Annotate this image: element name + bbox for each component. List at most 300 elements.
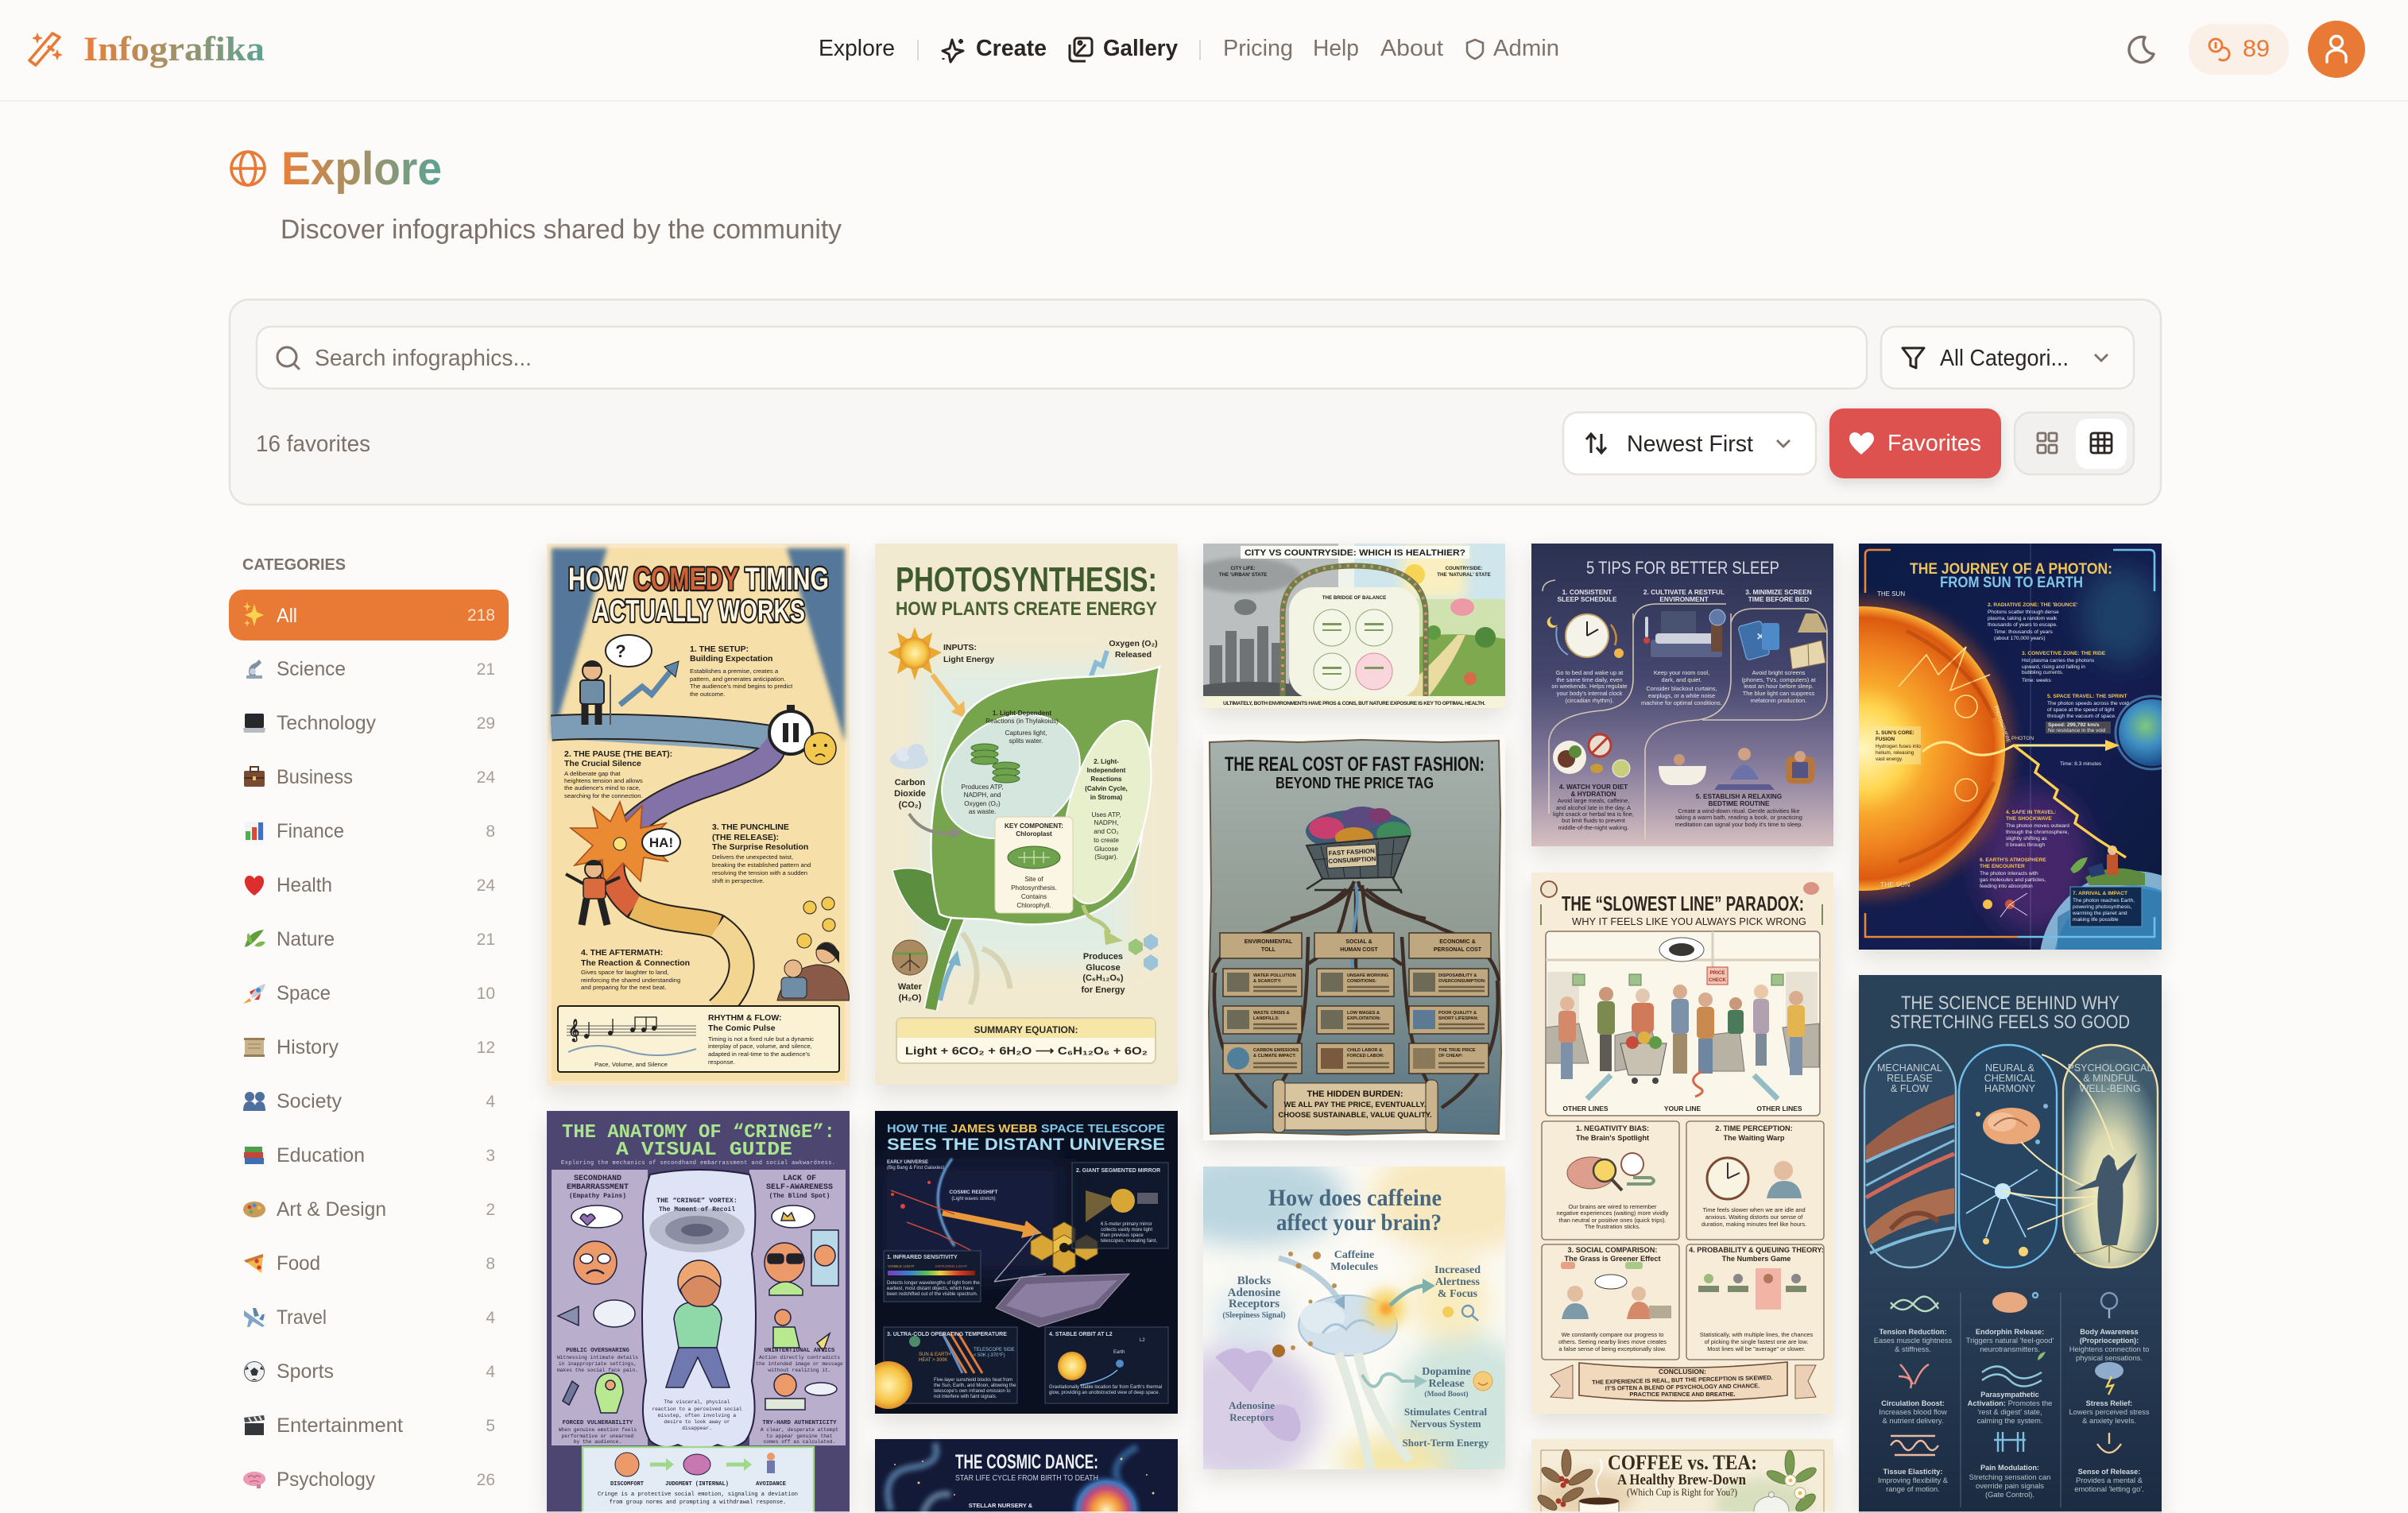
category Sports	[245, 1360, 495, 1383]
infographic card: The Slowest Line Paradox: others. Seeing nearby lines move creates	[1558, 1338, 1667, 1345]
benefit text: Lowers perceived stress	[2069, 1407, 2150, 1416]
photon annotations: Hydrogen fuses into	[1876, 744, 1921, 749]
caffeine labels: Caffeine	[1334, 1249, 1374, 1261]
photon annotations: of space at the speed of light	[2047, 707, 2114, 713]
photosynthesis labels: Independent	[1087, 767, 1126, 774]
infographic card: The Slowest Line Paradox: Time feels slower when we are idle and	[1702, 1206, 1806, 1213]
photosynthesis labels	[894, 639, 1158, 1003]
sleep bottom text: light snack or herbal tea is fine,	[1553, 811, 1634, 818]
shoppers	[1558, 985, 1805, 1079]
category select: All Categori...	[1940, 346, 2069, 371]
capsule panels: & MINDFUL	[2083, 1073, 2137, 1084]
photon annotations: thousands of years to escape.	[1988, 622, 2058, 628]
capsule panels: PSYCHOLOGICAL	[2068, 1062, 2153, 1074]
caffeine molecules and receptors	[1215, 1252, 1337, 1441]
countryside hills	[1354, 564, 1505, 708]
webb labels: (Light waves stretch)	[951, 1197, 996, 1202]
infographic card: The Real Cost of Fast Fashion: FORCED LABOR:	[1347, 1054, 1384, 1058]
webb labels: VISIBLE LIGHT	[888, 1264, 915, 1269]
benefit text: Provides a mental &	[2076, 1476, 2143, 1484]
sleep illustrations bottom	[1553, 734, 1814, 790]
sleep top text: (circadian rhythm).	[1565, 697, 1614, 704]
nav link Admin: Admin	[1493, 36, 1559, 61]
webb labels: not interfere with faint signals.	[934, 1395, 997, 1399]
comedy step text: The Crucial Silence	[564, 759, 641, 768]
hidden burden scroll: CHOOSE SUSTAINABLE, VALUE QUALITY.	[1278, 1111, 1432, 1120]
conclusion banner	[1550, 1362, 1816, 1401]
nav link Create: Create	[976, 36, 1047, 61]
comedy rhythm box	[558, 1006, 839, 1072]
overflowing cart: CONSUMPTION	[1328, 855, 1376, 865]
sleep top text: 1. CONSISTENT	[1562, 588, 1612, 596]
benefit text: 'rest & digest' state,	[1977, 1407, 2042, 1416]
sort select	[1563, 412, 1816, 474]
city title: CITY VS COUNTRYSIDE: WHICH IS HEALTHIER?	[1245, 548, 1465, 558]
cringe panel text: The visceral, physical	[664, 1399, 730, 1405]
benefit text: Parasympathetic	[1980, 1391, 2039, 1399]
cringe panel text: A clear, desperate attempt	[761, 1427, 838, 1433]
category Art and Design: 2	[486, 1201, 495, 1219]
photosynthesis labels: Light Energy	[943, 655, 994, 664]
cringe title: THE ANATOMY OF “CRINGE”:	[562, 1122, 835, 1143]
webb labels: been redshifted out of the visible spectrum.	[887, 1292, 978, 1297]
cringe panel text: without realizing it.	[768, 1368, 831, 1373]
city labels: COUNTRYSIDE:	[1446, 566, 1482, 571]
sun and arrow	[888, 627, 1107, 718]
webb labels: Detects longer wavelengths of light from the	[887, 1281, 980, 1286]
hidden burden scroll	[1273, 1080, 1438, 1132]
category Sports: Sports	[277, 1360, 334, 1383]
infographic card: The Slowest Line Paradox: of picking the single fastest one are low.	[1705, 1338, 1808, 1345]
category Education: 3	[486, 1147, 495, 1165]
webb labels: (Big Bang & First Galaxies)	[887, 1166, 944, 1171]
sleep bottom text: BEDTIME ROUTINE	[1709, 799, 1770, 807]
infographic card: The Real Cost of Fast Fashion: & CLIMATE IMPACT:	[1253, 1054, 1296, 1058]
photosynthesis labels: 1. Light-Dependent	[993, 710, 1051, 717]
infographic card: The Real Cost of Fast Fashion: EXPLOITATION:	[1347, 1016, 1381, 1021]
benefit text: Circulation Boost:	[1881, 1399, 1945, 1407]
infographic card: The Slowest Line Paradox: duration, making minutes feel like hours.	[1701, 1221, 1806, 1228]
webb labels: Gravitationally stable location far from Earth's thermal	[1049, 1385, 1162, 1390]
photon annotations: warming the planet and	[2072, 911, 2127, 916]
category Art and Design	[243, 1198, 495, 1221]
cringe panel text: disappear.	[682, 1426, 712, 1431]
infographic card: The Real Cost of Fast Fashion: POOR QUALITY &	[1438, 1011, 1477, 1016]
capsule panels: RELEASE	[1887, 1073, 1933, 1084]
cringe panel text: makes the social face pain.	[557, 1368, 638, 1373]
infographic card: The Anatomy of Cringe: Exploring the mechanics of secondhand embarrassment and social awkwardness.	[561, 1160, 835, 1167]
caffeine icons	[1442, 1306, 1492, 1391]
infographic card: The Real Cost of Fast Fashion: BEYOND THE PRICE TAG	[1276, 775, 1434, 792]
photon annotations: bubbling currents.	[2022, 670, 2064, 675]
caffeine labels: Release	[1428, 1378, 1465, 1390]
webb labels: 3. ULTRA-COLD OPERATING TEMPERATURE	[887, 1332, 1007, 1337]
sidebar heading: CATEGORIES	[242, 556, 346, 574]
cringe panel text: THE “CRINGE” VORTEX:	[656, 1197, 737, 1205]
sleep bottom text: but limit fluids to prevent	[1562, 817, 1625, 824]
leaf illustration	[892, 667, 1167, 1009]
cringe panel text: FORCED VULNERABILITY	[563, 1420, 633, 1426]
photon annotations: Speed: 299,792 km/s	[2048, 722, 2100, 728]
city labels	[1219, 566, 1491, 601]
photosynthesis labels: Contains	[1021, 893, 1047, 900]
caffeine labels: Nervous System	[1410, 1418, 1481, 1430]
benefit text: neurotransmitters.	[1980, 1345, 2040, 1353]
corner icons	[1541, 881, 1822, 925]
sleep top text: machine for optimal conditions.	[1641, 699, 1722, 706]
benefit text: Body Awareness	[2080, 1328, 2139, 1336]
photon annotations: PHOTOSPHERE	[1992, 705, 2011, 744]
infographic card: The Cosmic Dance: STAR LIFE CYCLE FROM BIRTH TO DEATH	[955, 1473, 1098, 1483]
sunshield and mirror	[994, 1222, 1129, 1327]
photon annotations: THE SUN	[1880, 880, 1910, 888]
dark mode moon icon	[2129, 37, 2154, 62]
credits pill: 89	[2243, 36, 2270, 62]
sleep top text: 3. MINIMIZE SCREEN	[1745, 588, 1812, 596]
fashion panels	[1220, 933, 1491, 1074]
photosynthesis labels: Glucose	[1094, 846, 1118, 853]
page header	[231, 143, 842, 245]
caffeine labels: Receptors	[1229, 1411, 1274, 1423]
infographic card: The Real Cost of Fast Fashion: CARBON EMISSIONS	[1253, 1048, 1299, 1053]
comedy step text: heightens tension and allows	[564, 777, 643, 784]
comedy rhythm box: response.	[708, 1058, 735, 1066]
sleep top text: on weekends. Helps regulate	[1551, 683, 1628, 690]
sleep bottom text: 4. WATCH YOUR DIET	[1559, 783, 1628, 791]
comedy step text: 2. THE PAUSE (THE BEAT):	[564, 749, 672, 759]
cringe response box: JUDGMENT (INTERNAL)	[665, 1481, 729, 1488]
infographic card: The Real Cost of Fast Fashion: OVERCONSUMPTION:	[1438, 979, 1486, 984]
caffeine labels: Increased	[1434, 1264, 1481, 1276]
comedy step text: pattern, and generates anticipation.	[690, 675, 786, 683]
sleep bottom text: taking a warm bath, reading a book, or practicing	[1675, 814, 1802, 821]
photosynthesis labels: Oxygen (O₂)	[964, 800, 1001, 807]
cringe response box: Cringe is a protective social emotion, signaling a deviation	[598, 1492, 798, 1498]
webb labels: the Sun, Earth, and Moon, allowing the	[934, 1383, 1016, 1388]
summary equation box: SUMMARY EQUATION:	[974, 1024, 1078, 1035]
infographic card: The Slowest Line Paradox: Most lines will be "average" or slower.	[1707, 1345, 1806, 1352]
photosynthesis labels: (Calvin Cycle,	[1085, 785, 1128, 792]
comedy winding road	[552, 726, 773, 1010]
infographic card: The Slowest Line Paradox: The frustration sticks.	[1585, 1223, 1640, 1230]
cringe panel text: SECONDHAND	[574, 1174, 621, 1183]
category Food	[244, 1252, 495, 1275]
photon annotations: 6. EARTH'S ATMOSPHERE	[1980, 857, 2046, 863]
supermarket scene	[1546, 931, 1820, 1116]
comedy step text: A deliberate gap that	[564, 770, 621, 777]
photon annotations: powering photosynthesis,	[2073, 904, 2132, 910]
category Finance: Finance	[277, 820, 344, 842]
comedy rhythm box: Pace, Volume, and Silence	[594, 1061, 668, 1068]
cringe panel text: SELF-AWARENESS	[766, 1183, 833, 1192]
city footer strip: ULTIMATELY, BOTH ENVIRONMENTS HAVE PROS & CONS, BUT NATURE EXPOSURE IS KEY TO OPTIMAL HEALTH.	[1223, 701, 1485, 706]
city labels: THE 'NATURAL' STATE	[1437, 572, 1491, 578]
infographic card: The Slowest Line Paradox: anxious. Waiting distorts our sense of	[1705, 1213, 1803, 1221]
photon annotations: Photons scatter through dense	[1988, 609, 2059, 615]
infographic card: The Cosmic Dance: STELLAR NURSERY &	[969, 1502, 1033, 1509]
category Science: Science	[277, 658, 346, 680]
hidden burden scroll: WE ALL PAY THE PRICE, EVENTUALLY.	[1284, 1101, 1426, 1109]
webb labels: L2	[1140, 1338, 1145, 1343]
webb labels	[887, 1160, 1162, 1399]
photosynthesis labels: Uses ATP,	[1091, 811, 1121, 818]
infographic card: The Real Cost of Fast Fashion: HUMAN COST	[1340, 947, 1378, 953]
cringe panel text: TRY-HARD AUTHENTICITY	[762, 1420, 837, 1426]
nav link About: About	[1380, 36, 1443, 61]
webb labels: HEAT > 300K	[919, 1358, 947, 1363]
photon annotations: The photon reaches Earth,	[2073, 898, 2135, 904]
category Entertainment: 5	[486, 1417, 495, 1435]
benefit text: Triggers natural 'feel-good'	[1966, 1336, 2054, 1345]
hidden burden scroll: THE HIDDEN BURDEN:	[1307, 1089, 1403, 1099]
photon annotations: helium, releasing	[1876, 750, 1914, 756]
conclusion banner: PRACTICE PATIENCE AND BREATHE.	[1629, 1391, 1736, 1398]
photosynthesis labels: Chlorophyll.	[1016, 902, 1051, 909]
top navigation bar	[0, 21, 2408, 102]
cosmic title: THE COSMIC DANCE:	[955, 1451, 1098, 1473]
category Business	[244, 766, 495, 788]
photosynthesis labels: to create	[1094, 837, 1119, 844]
sleep top text: ENVIRONMENT	[1659, 595, 1709, 603]
category Business: 24	[477, 768, 495, 787]
capsule panels: & FLOW	[1891, 1083, 1929, 1094]
caffeine labels: Receptors	[1229, 1298, 1279, 1310]
category Space: 10	[477, 985, 495, 1003]
category Business: Business	[277, 766, 353, 788]
nav icon Admin shield	[1467, 40, 1483, 59]
infographic card: City vs Countryside	[1203, 544, 1505, 708]
photosynthesis labels: Water	[898, 982, 923, 992]
heading Explore: Explore	[281, 143, 442, 195]
supermarket scene: OTHER LINES	[1756, 1105, 1802, 1112]
photosynthesis labels: Site of	[1024, 876, 1043, 883]
webb labels: glow, providing an unobstructed view of deep space.	[1049, 1391, 1159, 1395]
infographic card: The Slowest Line Paradox: Our brains are wired to remember	[1569, 1203, 1657, 1210]
category Food: Food	[277, 1252, 320, 1275]
caffeine labels: Blocks	[1237, 1275, 1271, 1287]
comedy step text: Gives space for laughter to land,	[581, 969, 669, 976]
photon earth views	[2039, 696, 2227, 1058]
cringe panel text: performative or unearned	[562, 1434, 634, 1439]
capsule panels	[1864, 1045, 2158, 1267]
benefit text: Tension Reduction:	[1879, 1328, 1947, 1336]
cringe panel text: in inappropriate settings,	[559, 1361, 637, 1367]
photon annotations: The photon moves outward	[2006, 823, 2069, 829]
photosynthesis labels: Photosynthesis.	[1011, 884, 1057, 892]
webb labels: SUN & EARTH	[919, 1352, 950, 1357]
benefit text: & stiffness.	[1895, 1345, 1931, 1353]
category Education	[244, 1144, 495, 1167]
cringe panel text: EMBARRASSMENT	[567, 1183, 629, 1192]
photon annotations: Time: weeks	[2022, 678, 2051, 683]
cringe panel text	[557, 1174, 843, 1445]
photon annotations: 5. SPACE TRAVEL: THE SPRINT	[2047, 694, 2127, 699]
cringe panel text: PUBLIC OVERSHARING	[566, 1348, 629, 1354]
city title	[1241, 546, 1469, 559]
category Society: 4	[486, 1093, 495, 1111]
infographic card: The Real Cost of Fast Fashion: ENVIRONMENTAL	[1245, 939, 1293, 945]
nav link Pricing: Pricing	[1223, 36, 1293, 61]
caffeine labels	[1222, 1249, 1489, 1449]
capsule panels: CHEMICAL	[1984, 1073, 2035, 1084]
coffee title: COFFEE vs. TEA:	[1608, 1451, 1757, 1474]
photon annotations: Time: thousands of years	[1994, 629, 2053, 635]
photon annotations: THE SHOCKWAVE	[2006, 816, 2052, 822]
photon annotations: 3. CONVECTIVE ZONE: THE RIDE	[2022, 651, 2106, 656]
sleep top text: dark, and quiet.	[1662, 676, 1701, 683]
photon annotations: The photon interacts with	[1980, 871, 2038, 876]
category Sports: 4	[486, 1363, 495, 1381]
infographic card: How the James Webb Space Telescope Sees the Distant Universe	[875, 1111, 1178, 1414]
infographic card: The Real Cost of Fast Fashion: THE TRUE PRICE	[1438, 1048, 1476, 1053]
photon annotations: through the vacuum of space.	[2047, 714, 2116, 719]
webb labels: than previous space	[1101, 1233, 1144, 1238]
sleep bottom text: and alcohol late in the day. A	[1556, 804, 1631, 811]
webb labels: Earth	[1113, 1350, 1125, 1355]
infographic card: The Real Cost of Fast Fashion: LANDFILLS:	[1253, 1016, 1279, 1021]
search input	[257, 327, 1867, 389]
cringe panel text: UNINTENTIONAL ANTICS	[765, 1348, 835, 1354]
cringe panel text: (Empathy Pains)	[569, 1193, 626, 1200]
category Health	[245, 874, 495, 896]
sleep top text: 2. CULTIVATE A RESTFUL	[1643, 588, 1725, 596]
category Science: 21	[477, 660, 495, 679]
infographic card: How the James Webb Space Telescope Sees the Distant Universe: SEES THE DISTANT UNIVERSE	[887, 1136, 1165, 1154]
infographic card: The Real Cost of Fast Fashion: WASTE CRISIS &	[1253, 1011, 1290, 1016]
webb labels: 6.5-meter primary mirror	[1101, 1222, 1152, 1227]
cringe panel text: Action directly contradicts	[759, 1355, 840, 1360]
photon annotations: vast energy.	[1876, 756, 1903, 762]
photon annotations: No resistance in the void	[2048, 728, 2106, 733]
caffeine labels: & Focus	[1438, 1288, 1478, 1300]
category Food: 8	[486, 1255, 495, 1273]
cringe panel text: The Moment of Recoil	[659, 1206, 735, 1213]
infographic card: The Slowest Line Paradox: The Numbers Game	[1722, 1255, 1791, 1263]
comedy rhythm box: interplay of pace, volume, and silence,	[708, 1043, 812, 1050]
benefit text: (Gate Control).	[1985, 1490, 2034, 1499]
category Travel	[244, 1306, 495, 1329]
infographic card: How does caffeine affect your brain	[1203, 1167, 1505, 1469]
logo wordmark: Infografika	[83, 31, 265, 68]
cringe response box: from group norms and prompting a withdrawal response.	[610, 1499, 786, 1506]
infographic card: The Slowest Line Paradox: 1. NEGATIVITY BIAS:	[1576, 1124, 1649, 1132]
cringe panel text: LACK OF	[783, 1174, 816, 1183]
sleep top text: least an hour before sleep.	[1744, 683, 1814, 690]
category Travel: Travel	[277, 1306, 327, 1329]
cringe panel text: When genuine emotion feels	[559, 1427, 637, 1433]
supermarket scene: CHECK	[1709, 977, 1727, 983]
category History: History	[277, 1036, 339, 1058]
benefit text: Sense of Release:	[2078, 1468, 2140, 1476]
category Technology: 29	[477, 714, 495, 733]
webb labels: earliest, most distant objects, which have	[887, 1287, 974, 1291]
stretching title: THE SCIENCE BEHIND WHY	[1901, 993, 2120, 1014]
supermarket scene: YOUR LINE	[1664, 1105, 1701, 1112]
photosynthesis labels: in Stroma)	[1090, 794, 1123, 801]
cups	[1579, 1459, 1789, 1513]
infographic card: The Real Cost of Fast Fashion: LOW WAGES &	[1347, 1011, 1380, 1016]
category Finance	[245, 820, 495, 842]
vortex	[649, 1208, 745, 1252]
summary equation box	[896, 1018, 1156, 1063]
benefit text: Activation: Promotes the	[1968, 1399, 2052, 1407]
infographic card: Coffee vs Tea: (Which Cup is Right for You?)	[1627, 1486, 1737, 1498]
photon annotations: Time: 8.3 minutes	[2060, 761, 2102, 767]
benefit text: emotional 'letting go'.	[2074, 1484, 2144, 1493]
sleep top text: Avoid bright screens	[1752, 669, 1806, 676]
infographic card: The Real Cost of Fast Fashion: & SCARCITY:	[1253, 979, 1282, 984]
capsule panels: NEURAL &	[1985, 1062, 2035, 1074]
infographic card: The Cosmic Dance	[875, 1439, 1178, 1513]
active category All: All	[277, 605, 297, 627]
category Art and Design: Art & Design	[277, 1198, 386, 1221]
category Society: Society	[277, 1090, 342, 1112]
photosynthesis labels: Produces ATP,	[962, 784, 1003, 791]
cringe faces right	[765, 1205, 838, 1410]
comedy step text: The Surprise Resolution	[712, 842, 808, 852]
central cloud	[642, 1170, 756, 1449]
photon annotations: through the chromosphere,	[2006, 830, 2069, 835]
infographic card: 5 Tips for Better Sleep	[1531, 544, 1833, 846]
capsule panels: WELL-BEING	[2079, 1083, 2141, 1094]
capsule panels: MECHANICAL	[1877, 1062, 1942, 1074]
infographic card: The Real Cost of Fast Fashion: SHORT LIFESPAN:	[1438, 1016, 1478, 1021]
benefit text: & nutrient delivery.	[1883, 1416, 1943, 1425]
cringe panel text: Witnessing intimate details	[557, 1355, 638, 1360]
webb labels: < 50K (-370°F)	[974, 1353, 1005, 1358]
city footer strip	[1203, 696, 1505, 708]
sleep top text: the same time daily, even	[1556, 676, 1623, 683]
summary equation box: Light + 6CO₂ + 6H₂O ⟶ C₆H₁₂O₆ + 6O₂	[905, 1044, 1148, 1057]
photon annotations: slightly shifting as	[2006, 836, 2047, 842]
category Health: 24	[477, 876, 495, 895]
comedy rhythm box: RHYTHM & FLOW:	[708, 1013, 782, 1023]
comedy step text: Delivers the unexpected twist,	[712, 853, 793, 861]
photosynthesis labels: (C₆H₁₂O₆)	[1082, 973, 1124, 983]
nav icon Gallery	[1070, 38, 1092, 61]
active category All	[229, 590, 509, 640]
category Entertainment	[244, 1414, 495, 1437]
avatar button	[2308, 21, 2365, 78]
caffeine labels: (Sleepiness Signal)	[1222, 1311, 1286, 1320]
city labels: THE 'URBAN' STATE	[1219, 572, 1267, 578]
infographic card: The Slowest Line Paradox: negative experiences (waiting) more vividly	[1557, 1209, 1669, 1217]
view toggle	[2015, 412, 2134, 474]
sleep top text: melatonin production.	[1751, 697, 1806, 704]
photon annotations: plasma, taking a random walk	[1988, 616, 2058, 621]
caffeine labels: (Mood Boost)	[1424, 1390, 1469, 1399]
infographic card: The Slowest Line Paradox: The Brain's Spotlight	[1576, 1134, 1649, 1142]
benefit text: calming the system.	[1977, 1416, 2042, 1425]
sleep top text: The blue light can suppress	[1743, 690, 1814, 697]
category Nature: 21	[477, 931, 495, 949]
side illustrations	[890, 744, 1158, 1004]
cringe panel text: (The Blind Spot)	[769, 1193, 830, 1200]
photosynthesis labels: 2. Light-	[1094, 758, 1119, 765]
comedy rhythm box: Timing is not a fixed rule but a dynamic	[708, 1035, 814, 1043]
sleep top text: your body's internal clock	[1557, 690, 1623, 697]
webb labels: telescope's own infrared emission to	[934, 1389, 1011, 1394]
photosynthesis labels: and CO₂	[1094, 828, 1119, 835]
category Psychology	[243, 1468, 495, 1491]
comedy figures	[566, 635, 850, 1000]
subtitle: Discover infographics shared by the community	[281, 215, 842, 245]
brain illustration	[1279, 1258, 1435, 1469]
comedy step text: The audience's mind begins to predict	[690, 683, 793, 690]
comedy step text: searching for the connection.	[564, 792, 643, 799]
city labels: CITY LIFE:	[1230, 566, 1256, 571]
globe icon	[231, 152, 265, 185]
